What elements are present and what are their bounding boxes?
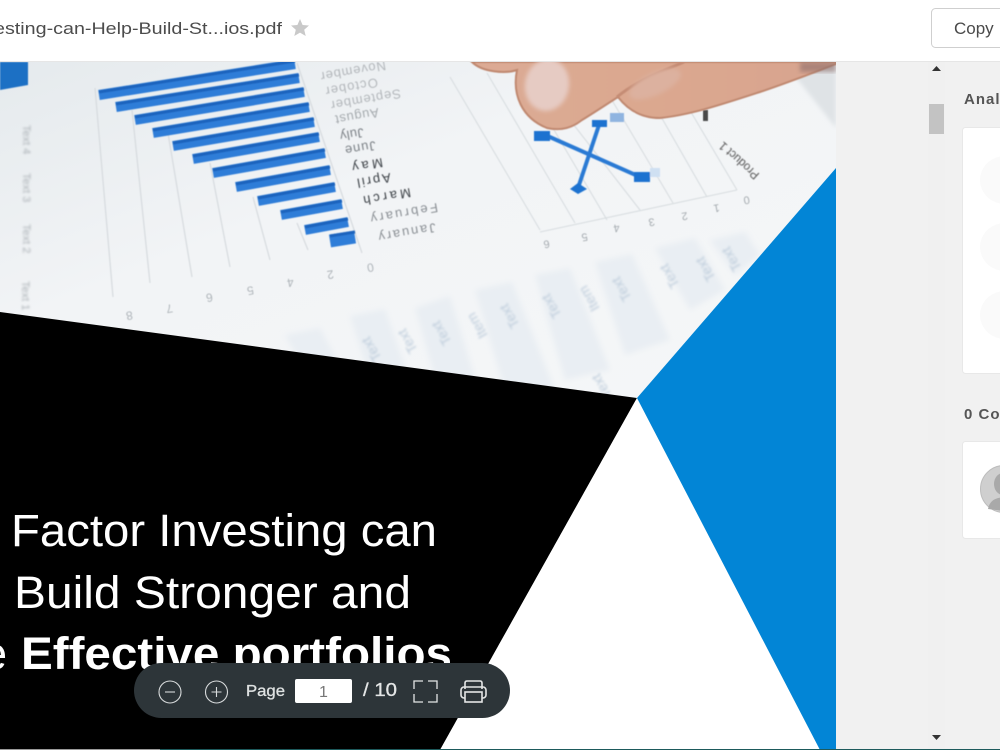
toolbar [134, 663, 510, 718]
blurred data table: Text [588, 371, 615, 402]
axis numbers: 0 [366, 260, 375, 275]
title: Factor Investing can [11, 505, 437, 556]
blurred data table: Text [496, 301, 523, 332]
bar chart [19, 58, 439, 323]
sidebar background [836, 62, 1000, 750]
month labels: February [369, 200, 439, 227]
scrollbar [928, 62, 945, 749]
side labels: Text 4 [20, 125, 32, 154]
month labels [319, 58, 439, 245]
side labels: Text 3 [20, 173, 32, 202]
blurred data table: Text [692, 254, 719, 284]
comment card [962, 442, 1000, 538]
blurred data table: Text [394, 326, 421, 356]
icon: zoom out [159, 681, 181, 703]
blurred data table: Text [428, 318, 455, 348]
side labels: Text 2 [20, 224, 32, 253]
blurred data table: Item [463, 310, 491, 342]
icon: print [461, 681, 486, 702]
icon: zoom in [206, 681, 228, 703]
month labels: August [334, 105, 380, 128]
icon: fullscreen [414, 681, 437, 702]
side labels [21, 125, 32, 310]
axis numbers: 6 [205, 290, 214, 305]
axis numbers: 8 [125, 308, 134, 323]
file name: esting-can-Help-Build-St...ios.pdf [0, 19, 282, 38]
line chart [450, 72, 762, 250]
line chart: 0 [742, 193, 751, 206]
month labels: April [356, 170, 392, 191]
header bar [0, 0, 1000, 62]
title: Effective portfolios [21, 628, 452, 679]
blurred data table: Item [575, 283, 603, 314]
month labels: October [324, 75, 379, 99]
white triangle [440, 398, 820, 750]
bottom edge strip [0, 749, 1000, 750]
side labels: Text 1 [19, 281, 31, 310]
hand holding paper [472, 56, 836, 129]
panel: document page [0, 56, 836, 750]
blurred data table: Text [358, 334, 385, 364]
month labels: March [362, 185, 412, 208]
page total: / 10 [363, 680, 397, 700]
month labels: September [329, 86, 402, 113]
line chart: 3 [647, 215, 656, 228]
axis numbers: 4 [286, 275, 295, 290]
title [0, 505, 452, 679]
blurred data table [285, 232, 760, 402]
axis numbers: 5 [246, 283, 255, 298]
line chart: 1 [712, 201, 721, 214]
corner blue tab [0, 62, 28, 90]
blue triangle [637, 168, 836, 750]
panel: analytics [962, 91, 1000, 374]
page label: Page [246, 683, 285, 700]
page input: 1 [319, 684, 328, 701]
axis numbers: 7 [165, 301, 174, 316]
month labels: June [344, 138, 377, 158]
line chart: 5 [580, 230, 589, 243]
panel: comments [962, 406, 1000, 538]
blurred data table: Text [656, 261, 683, 292]
axis numbers [125, 260, 375, 323]
line chart: 2 [680, 209, 689, 222]
month labels: May [350, 155, 384, 175]
icon: avatar [980, 466, 1000, 512]
month labels: November [319, 58, 387, 84]
paper corner backdrop [798, 68, 836, 124]
line chart: Product 1 [717, 139, 762, 181]
month labels: January [377, 220, 437, 245]
copy button [932, 8, 1000, 48]
line chart: 4 [612, 221, 621, 234]
blurred data table: Text [538, 291, 565, 322]
icon: star [291, 19, 309, 36]
analytics card [962, 128, 1000, 374]
axis numbers: 2 [326, 267, 335, 282]
title: Build Stronger and [14, 567, 411, 618]
page input [295, 679, 352, 703]
blurred data table: Text [608, 274, 635, 304]
month labels: July [338, 125, 365, 144]
panel: cover photo of charts on paper [0, 56, 836, 402]
copy button: Copy [954, 19, 994, 38]
line chart: 6 [542, 237, 551, 250]
black title panel [0, 312, 637, 750]
blurred data table: Text [718, 244, 745, 274]
